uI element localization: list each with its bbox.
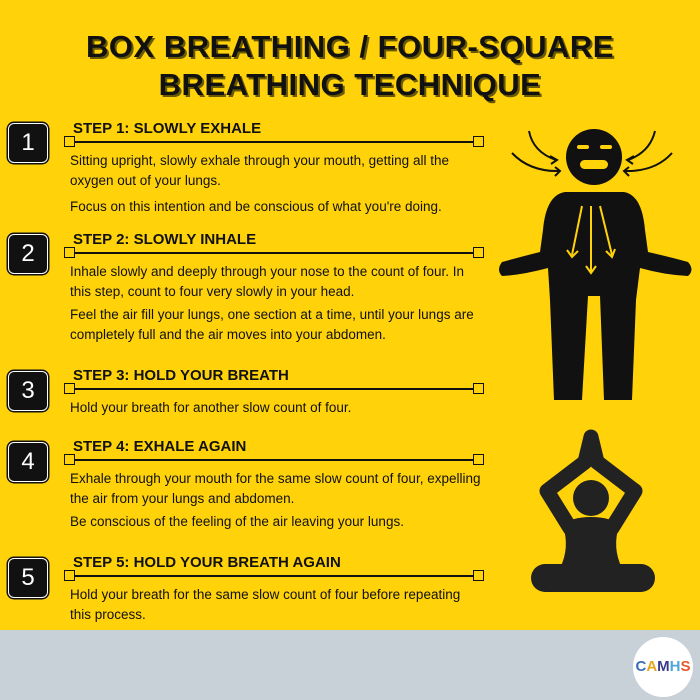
footer band	[0, 630, 700, 700]
number 3	[8, 371, 48, 411]
number 4	[8, 442, 48, 482]
number 4: 4	[21, 448, 35, 475]
title	[86, 29, 614, 104]
step 5	[64, 554, 484, 622]
number 5: 5	[21, 564, 35, 591]
step 2: Inhale slowly and deeply through your nose to the count of four. In this step, count to four very slowly in your head.	[70, 264, 464, 299]
number 1: 1	[21, 129, 35, 156]
step 2	[64, 231, 484, 342]
step 4: Exhale through your mouth for the same slow count of four, expelling the air from your lungs and abdomen.	[70, 471, 480, 506]
step 3: STEP 3: HOLD YOUR BREATH	[73, 367, 289, 384]
step 4: Be conscious of the feeling of the air leaving your lungs.	[70, 514, 404, 529]
number 1	[8, 123, 48, 163]
step 5: Hold your breath for the same slow count of four before repeating this process.	[70, 587, 460, 622]
logo: CAMHS: CAMHS	[635, 658, 691, 675]
number 2	[8, 234, 48, 274]
number 3: 3	[21, 377, 35, 404]
step 1: STEP 1: SLOWLY EXHALE	[73, 120, 261, 137]
title: BREATHING TECHNIQUE	[159, 67, 541, 102]
step 3: Hold your breath for another slow count of four.	[70, 400, 351, 415]
logo: CAMHS	[633, 637, 693, 697]
step 2: STEP 2: SLOWLY INHALE	[73, 231, 256, 248]
step 1: Focus on this intention and be conscious of what you're doing.	[70, 199, 442, 214]
number 2: 2	[21, 240, 35, 267]
step 4: STEP 4: EXHALE AGAIN	[73, 438, 246, 455]
step 2: Feel the air fill your lungs, one section at a time, until your lungs are completely full and the air moves into your abdomen.	[70, 307, 474, 342]
number 5	[8, 558, 48, 598]
step 5: STEP 5: HOLD YOUR BREATH AGAIN	[73, 554, 341, 571]
step 1: Sitting upright, slowly exhale through your mouth, getting all the oxygen out of your lungs.	[70, 153, 449, 188]
step 4	[64, 438, 484, 529]
step 1	[64, 120, 484, 214]
step 3	[64, 367, 484, 415]
title: BOX BREATHING / FOUR-SQUARE	[86, 29, 614, 64]
